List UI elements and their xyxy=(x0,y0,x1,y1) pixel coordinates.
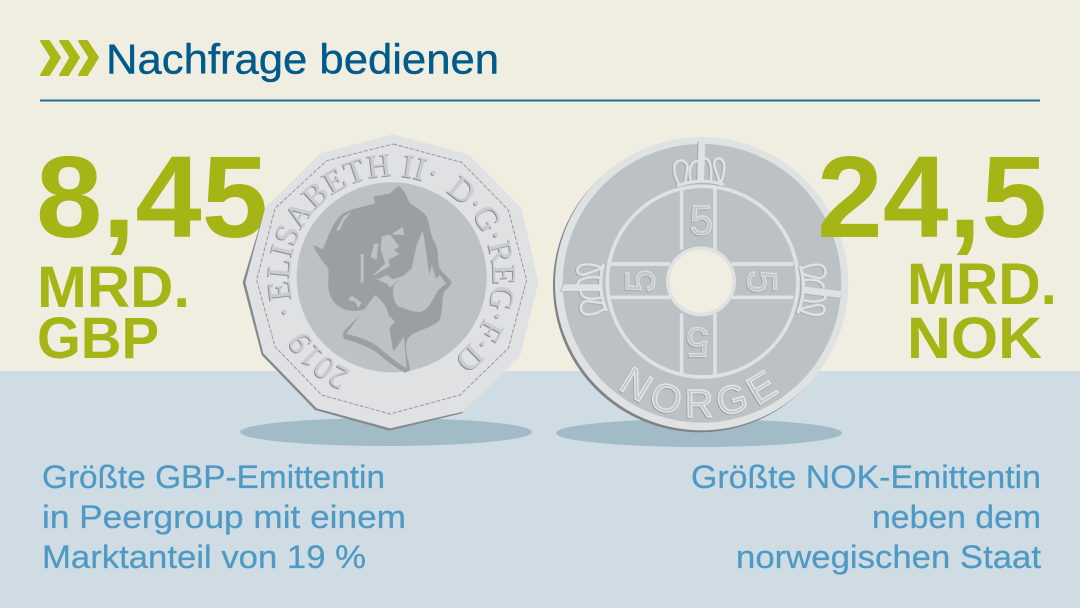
coin shadow: left xyxy=(240,418,532,446)
coin inscription: · xyxy=(282,310,286,315)
text block: GBP: in Peergroup mit einem xyxy=(42,499,406,535)
coin inscription: 2019 xyxy=(288,334,350,390)
crowns xyxy=(560,142,845,317)
coin inscription: · xyxy=(430,170,436,176)
figure: 24,5 Mrd. NOK xyxy=(817,132,1057,371)
portrait of the queen xyxy=(313,186,452,373)
text block: GBP xyxy=(42,459,406,575)
coin inscription: D·G·REG·F·D xyxy=(446,174,515,370)
coin: Norwegian krone xyxy=(553,137,848,432)
centre hole xyxy=(666,246,736,316)
crown: right xyxy=(797,263,845,317)
title text: Nachfrage bedienen xyxy=(106,36,499,82)
coin shadow: right xyxy=(556,419,842,447)
figure: 8,45 Mrd. GBP: MRD. xyxy=(37,255,190,320)
icon: triple chevron xyxy=(41,41,98,75)
figure: 8,45 Mrd. GBP: 8,45 xyxy=(36,132,268,262)
text block: NOK: Größte NOK-Emittentin xyxy=(691,459,1041,495)
denomination fives xyxy=(616,197,786,366)
crown: left xyxy=(560,264,606,316)
denomination fives: 5 xyxy=(739,270,786,293)
figure: 8,45 Mrd. GBP xyxy=(36,132,268,371)
coin: British pound xyxy=(242,134,538,431)
text block: NOK xyxy=(691,459,1041,575)
coin inscription: ELISABETH II xyxy=(267,154,428,302)
denomination fives: 5 xyxy=(686,319,709,366)
figure: 8,45 Mrd. GBP: GBP xyxy=(37,306,159,371)
cross bands xyxy=(608,187,793,375)
text block: GBP: Marktanteil von 19 % xyxy=(42,539,366,575)
figure: 24,5 Mrd. NOK: MRD. xyxy=(907,252,1057,317)
figure: 24,5 Mrd. NOK: 24,5 xyxy=(817,132,1047,262)
text block: GBP: Größte GBP-Emittentin xyxy=(42,459,385,495)
denomination fives: 5 xyxy=(690,197,713,244)
denomination fives: 5 xyxy=(616,269,663,293)
text block: NOK: norwegischen Staat xyxy=(736,539,1041,575)
coin inscription: NORGE xyxy=(618,366,780,419)
title heading xyxy=(41,36,499,82)
crown: top xyxy=(674,142,724,186)
figure: 24,5 Mrd. NOK: NOK xyxy=(907,306,1042,371)
text block: NOK: neben dem xyxy=(872,499,1041,535)
coin inscription xyxy=(267,154,515,390)
